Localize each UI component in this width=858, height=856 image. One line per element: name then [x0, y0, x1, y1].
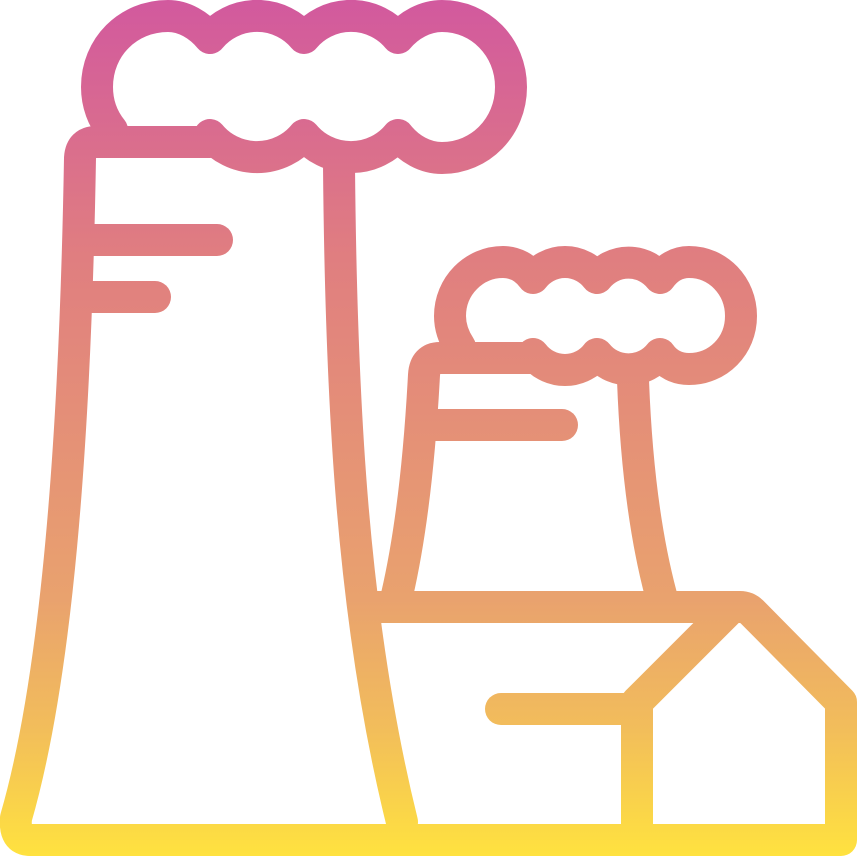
large cooling tower	[16, 142, 402, 840]
factory building	[30, 607, 841, 840]
large smoke cloud	[97, 16, 511, 158]
small smoke cloud	[450, 262, 741, 370]
small cooling tower	[397, 358, 661, 595]
